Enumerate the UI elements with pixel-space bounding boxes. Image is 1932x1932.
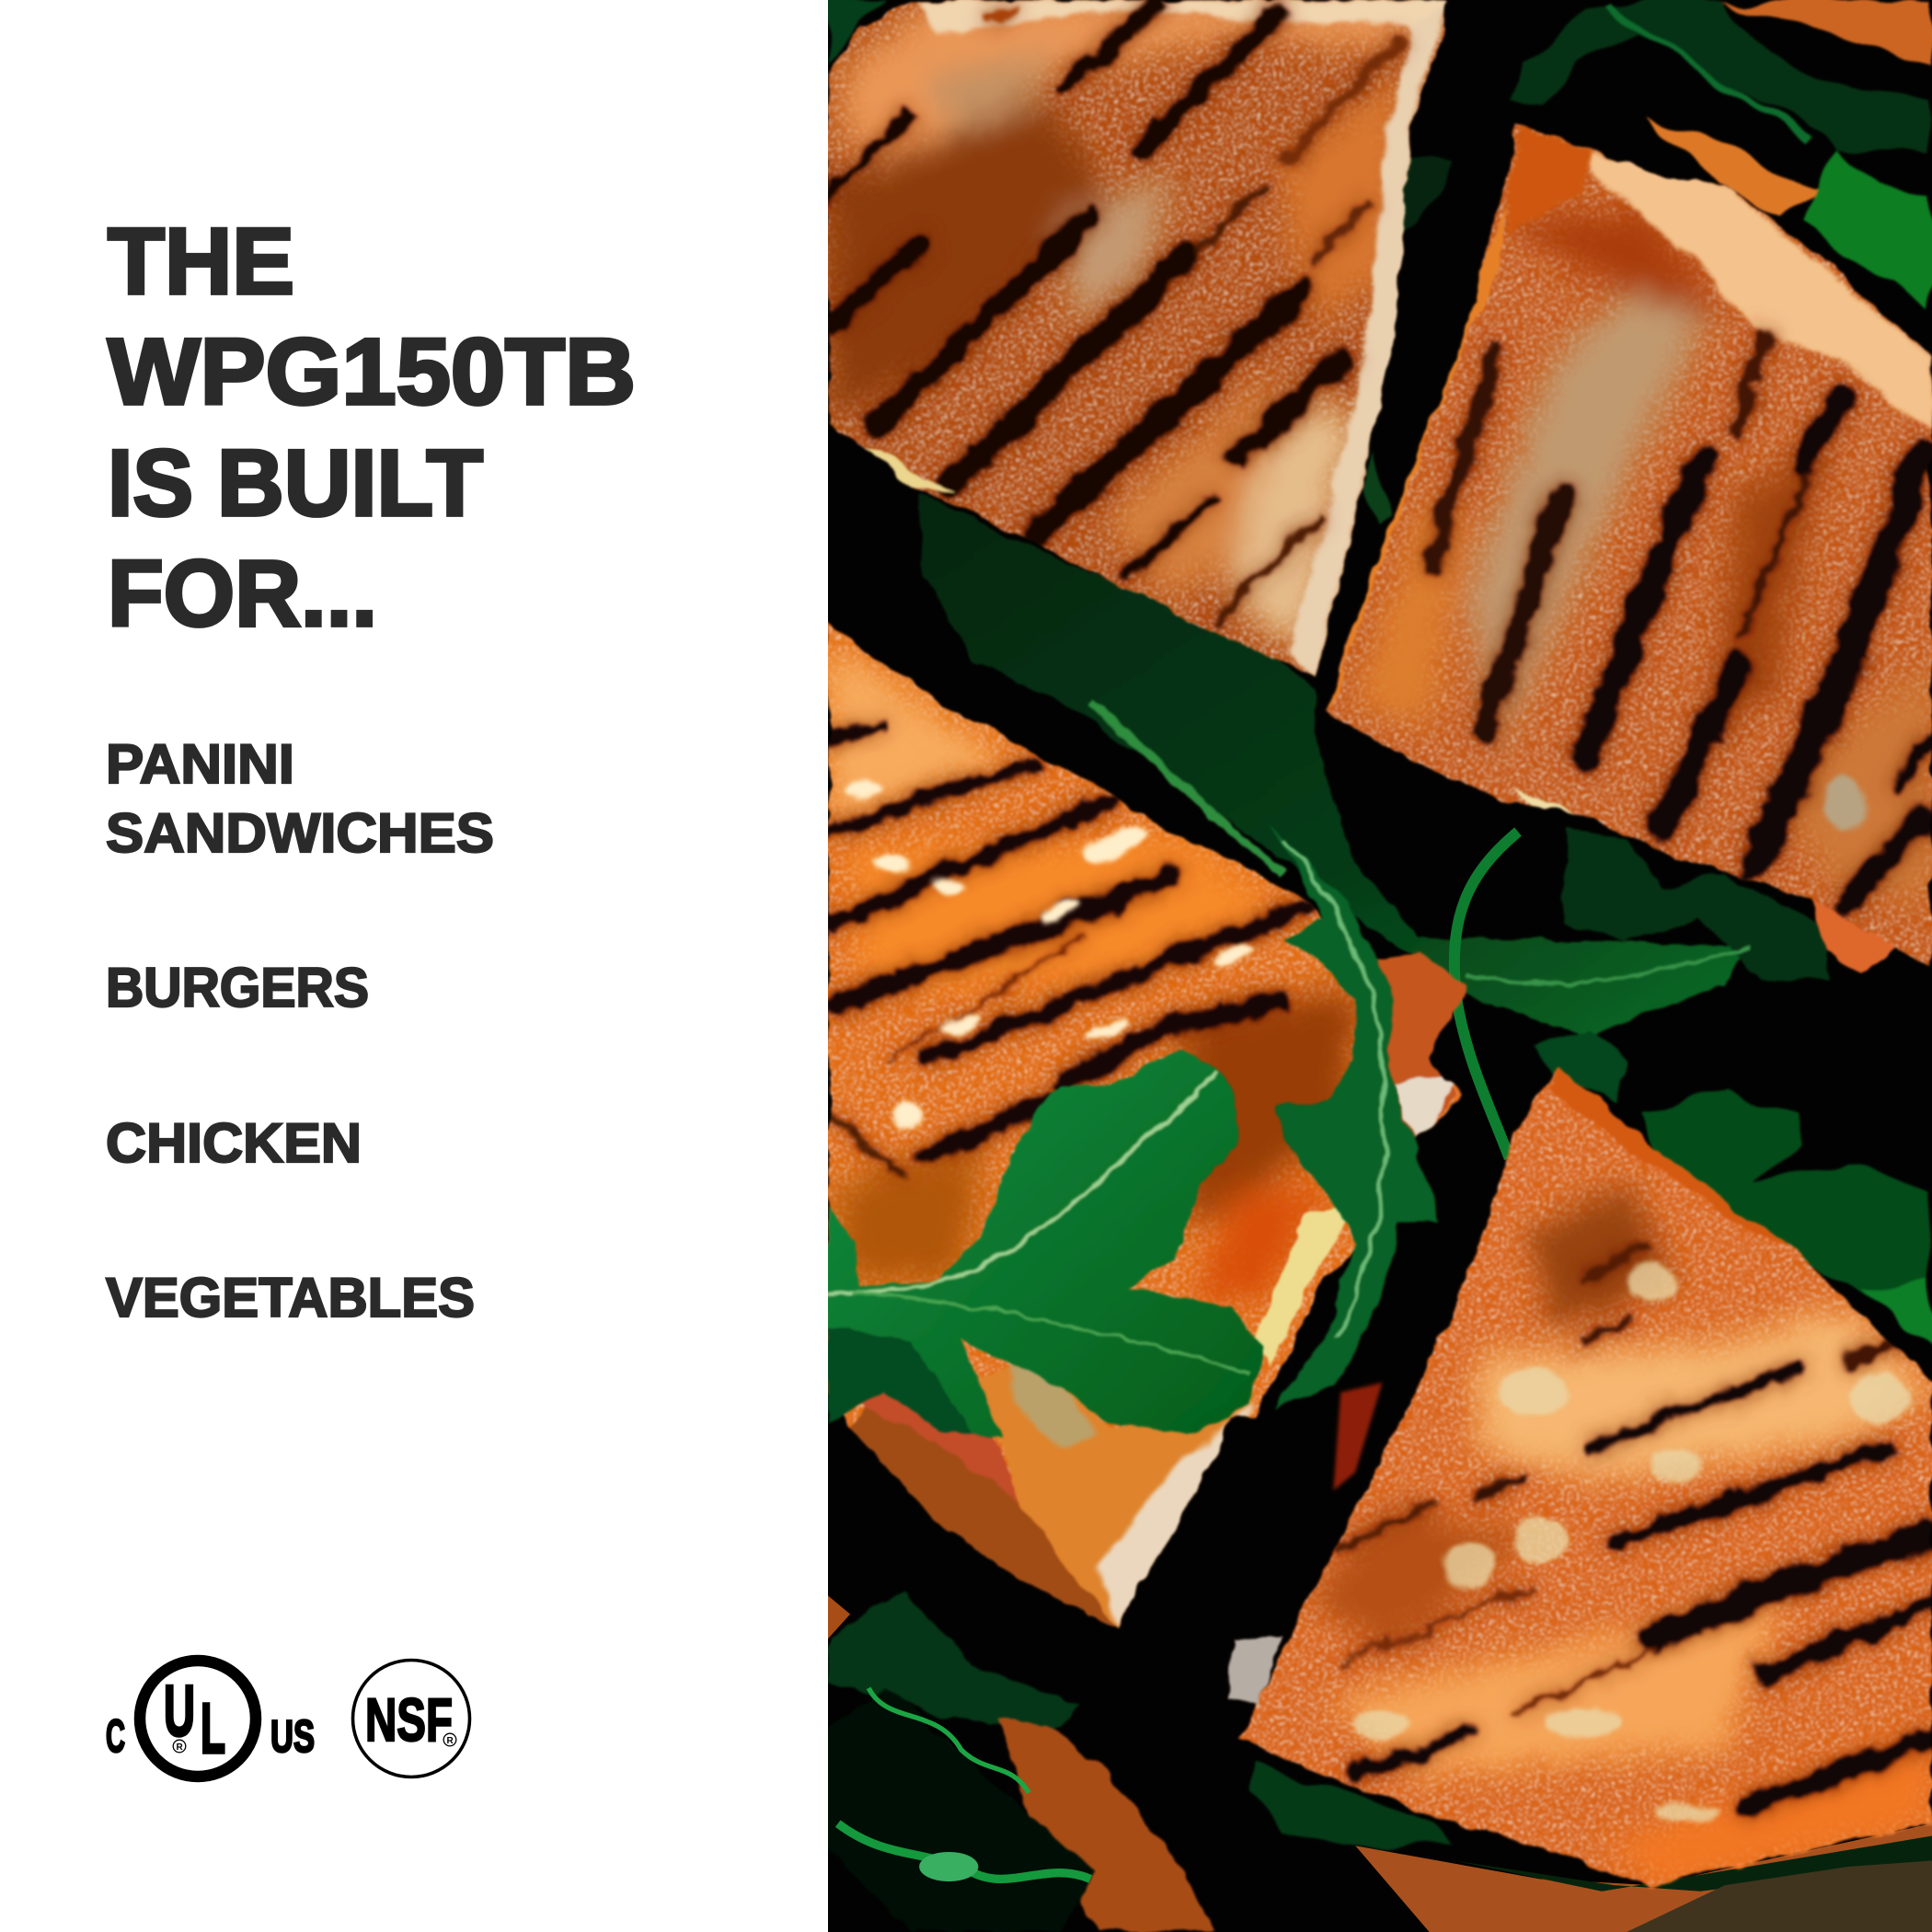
item: panini sandwiches [106, 733, 494, 864]
list of foods [106, 733, 494, 1328]
icon: cULus certification mark [106, 1661, 315, 1777]
leaves behind lower sandwich [1247, 1087, 1932, 1848]
icon: cULus certification mark: R [177, 1742, 184, 1753]
title: THE [108, 209, 294, 314]
icon: cULus certification mark: US [270, 1712, 315, 1762]
icon: NSF certification mark [353, 1660, 469, 1777]
icon: NSF certification mark: R [447, 1736, 454, 1746]
background leaves, top right [828, 0, 1932, 530]
sandwich top left [828, 0, 1456, 690]
sandwich bottom right [1230, 1060, 1932, 1932]
sandwich middle left [828, 616, 1481, 1639]
title: IS [108, 431, 193, 535]
rocket leaf, bright foreground [828, 1047, 1263, 1439]
item: vegetables: VEGETABLES [106, 1267, 475, 1328]
title: FOR... [108, 541, 377, 646]
title: BUILT [217, 431, 483, 535]
icon: cULus certification mark: U [164, 1670, 195, 1751]
icon: NSF certification mark: NSF [365, 1685, 453, 1754]
big dark leaf behind sandwiches [918, 493, 1830, 1103]
icon: cULus certification mark: C [106, 1710, 125, 1762]
icon: cULus certification mark: L [201, 1689, 225, 1768]
title [108, 209, 636, 646]
lower left bun and salad [828, 1590, 1213, 1932]
panel: sandwich photograph [828, 0, 1932, 1932]
title: WPG150TB [108, 319, 636, 424]
stem of rocket leaf [1455, 832, 1518, 1158]
sandwich top right [1318, 123, 1932, 973]
item: burgers: BURGERS [106, 957, 369, 1018]
item: panini sandwiches: PANINI [106, 733, 294, 795]
item: panini sandwiches: SANDWICHES [106, 802, 494, 864]
item: chicken: CHICKEN [106, 1112, 362, 1174]
rocket leaf, upright [1269, 823, 1439, 1410]
